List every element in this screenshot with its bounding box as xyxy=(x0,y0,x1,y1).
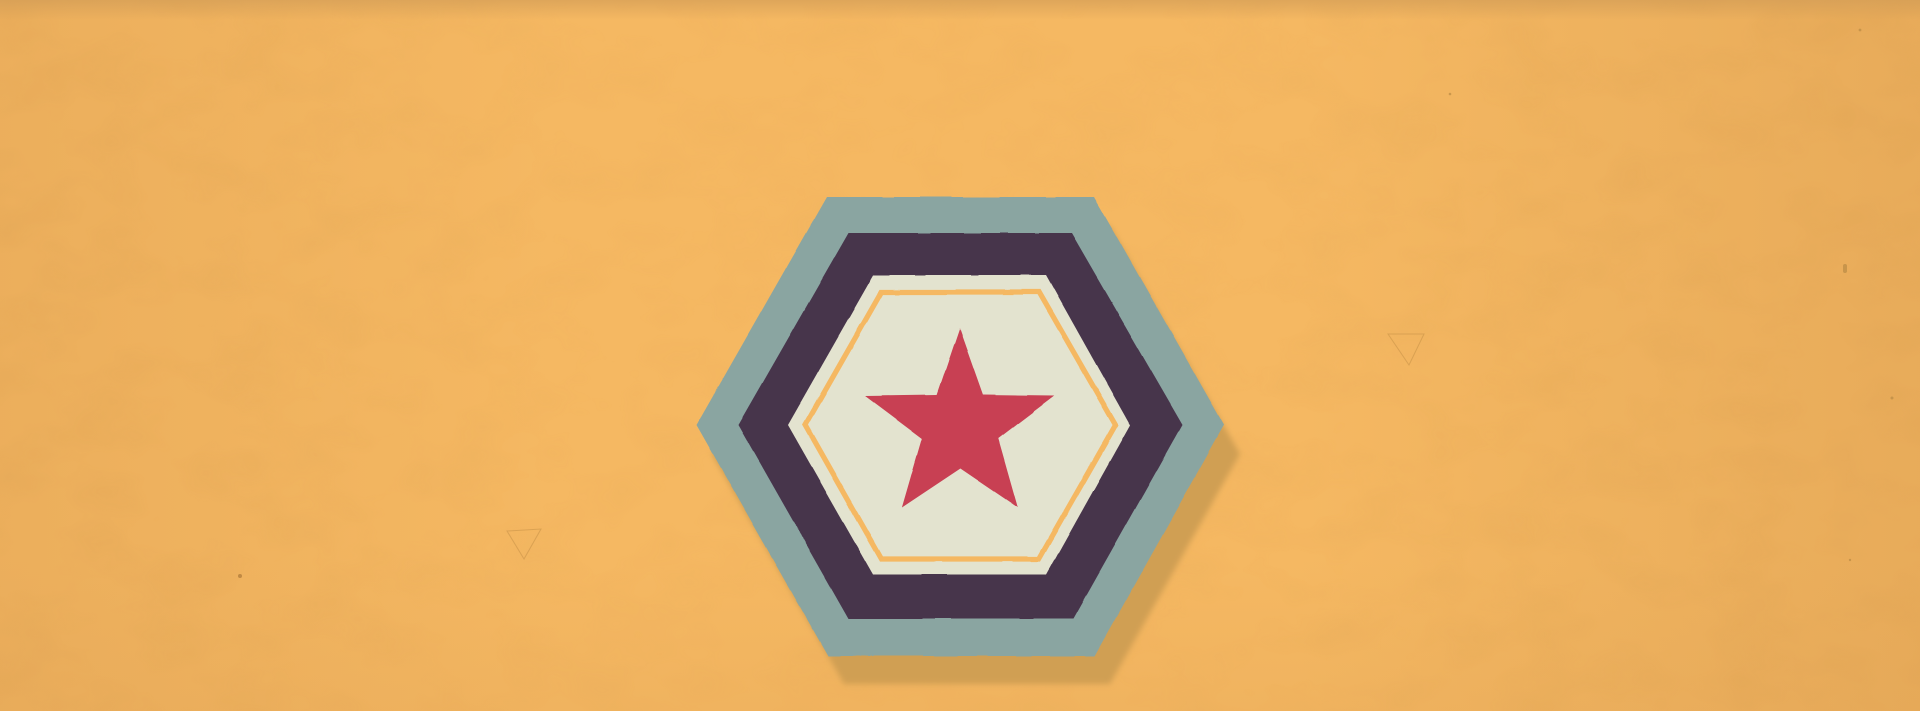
dark purple hexagon xyxy=(738,233,1182,618)
badge drop shadow xyxy=(712,226,1240,684)
hexagon badge xyxy=(696,197,1224,656)
decorative triangle left xyxy=(507,529,541,559)
cream hexagon xyxy=(788,275,1130,574)
decorative triangle right xyxy=(1388,334,1424,365)
orange hexagon outline xyxy=(806,292,1116,559)
red star xyxy=(865,328,1054,508)
outer teal hexagon xyxy=(696,197,1224,656)
